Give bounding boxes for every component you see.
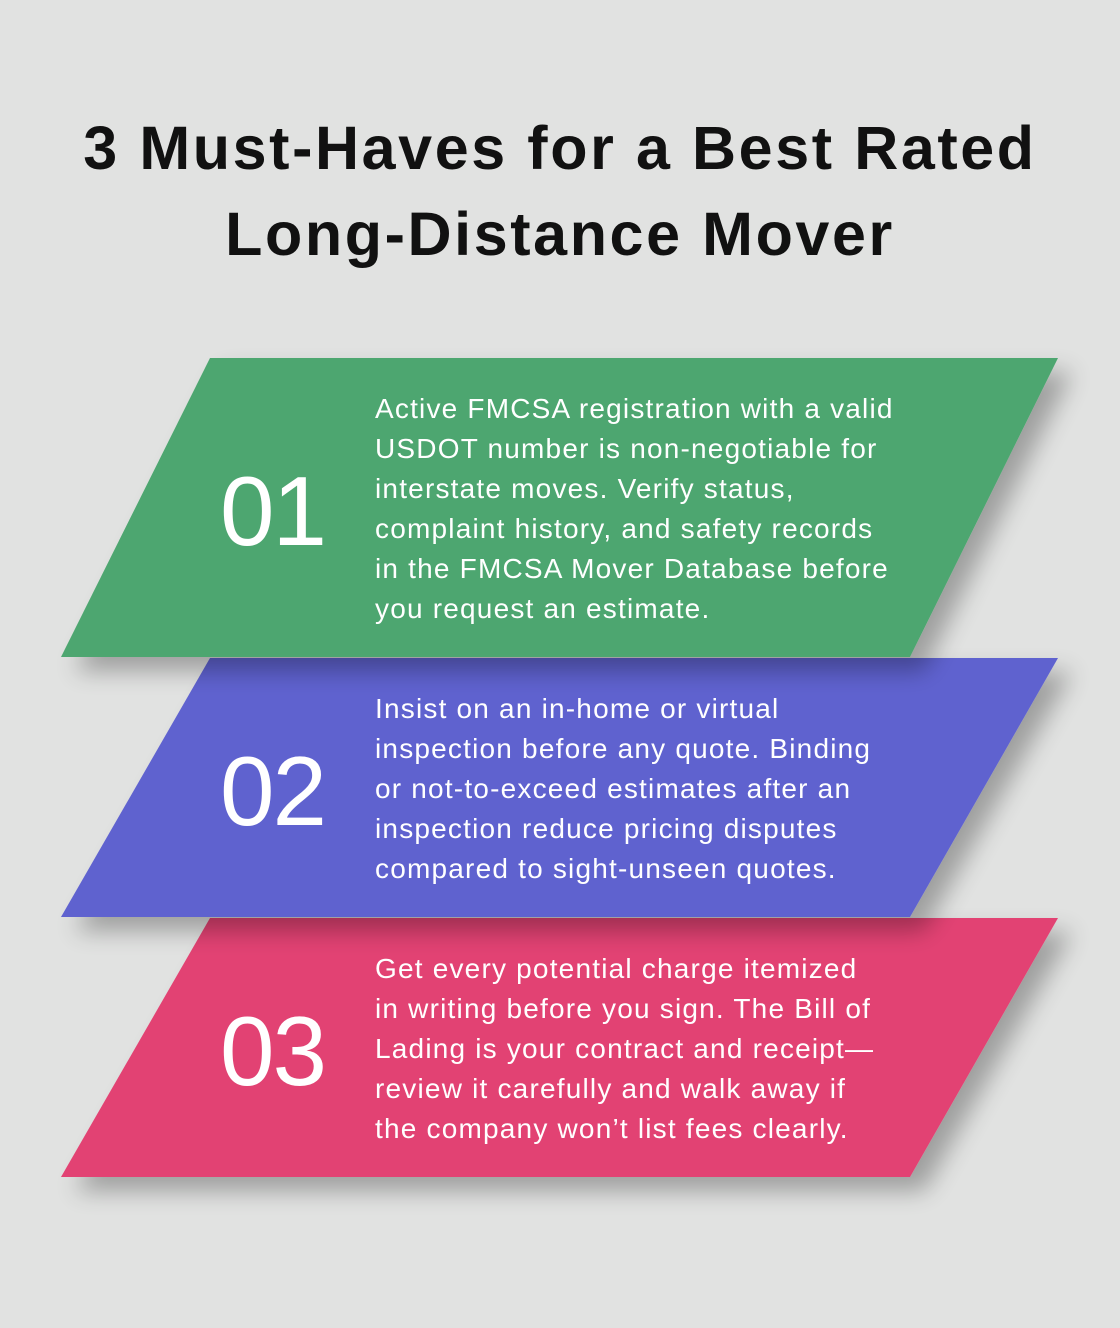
panel 3 text: the company won’t list fees clearly. <box>375 1113 849 1144</box>
panel 1 text: in the FMCSA Mover Database before <box>375 553 889 584</box>
panel 2 text: inspection before any quote. Binding <box>375 733 871 764</box>
panel 3 text: Get every potential charge itemized <box>375 953 857 984</box>
panel 2 shape <box>61 658 1058 917</box>
panel 1 text: Active FMCSA registration with a valid <box>375 393 894 424</box>
panel 2 text: inspection reduce pricing disputes <box>375 813 838 844</box>
panel 1 number: 01 <box>220 456 325 566</box>
panel 3 shape <box>61 918 1058 1177</box>
panel 1 text: USDOT number is non-negotiable for <box>375 433 878 464</box>
panel 3 text: Lading is your contract and receipt— <box>375 1033 874 1064</box>
panel 2 text: Insist on an in-home or virtual <box>375 693 779 724</box>
panel 1 text: complaint history, and safety records <box>375 513 873 544</box>
panel 2 text: or not-to-exceed estimates after an <box>375 773 851 804</box>
panel 3 text: review it carefully and walk away if <box>375 1073 846 1104</box>
panel 1 text: interstate moves. Verify status, <box>375 473 795 504</box>
panel 1 text: you request an estimate. <box>375 593 710 624</box>
panel 3 text <box>375 953 874 1144</box>
panel 2 text <box>375 693 871 884</box>
panel 1 text <box>375 393 894 624</box>
panel 2 text: compared to sight-unseen quotes. <box>375 853 837 884</box>
panel 3 number: 03 <box>220 996 325 1106</box>
panel 2 number: 02 <box>220 736 325 846</box>
title <box>83 114 1037 268</box>
title: Long-Distance Mover <box>225 200 895 268</box>
panel 1 shape <box>61 358 1058 657</box>
panel 3 text: in writing before you sign. The Bill of <box>375 993 871 1024</box>
title: 3 Must-Haves for a Best Rated <box>83 114 1037 182</box>
